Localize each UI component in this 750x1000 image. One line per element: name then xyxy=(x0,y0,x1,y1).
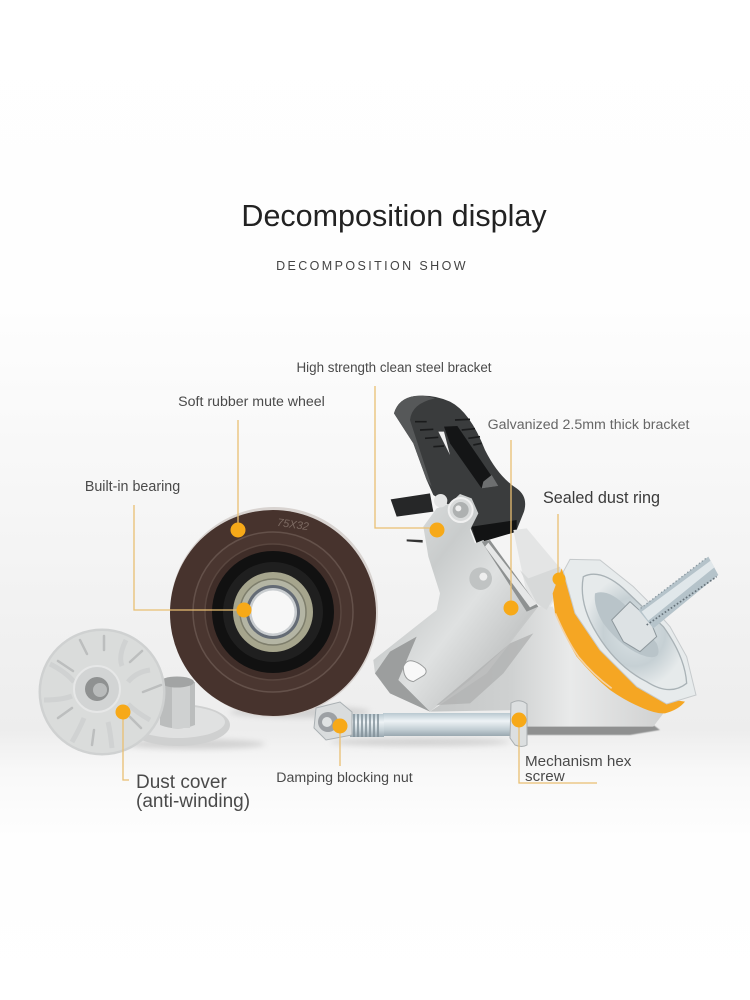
brake pedal xyxy=(391,396,525,543)
dust cover xyxy=(38,628,230,756)
sealed dust ring xyxy=(553,568,685,713)
label: galvanized bracket: Galvanized 2.5mm thick bracket xyxy=(488,417,689,433)
wheel xyxy=(170,507,378,717)
label: hex screw line one: Mechanism hex xyxy=(525,753,632,770)
label: soft rubber wheel: Soft rubber mute wheel xyxy=(178,394,325,410)
bracket side fold xyxy=(482,540,538,612)
subtitle: DECOMPOSITION SHOW xyxy=(276,259,468,273)
label: sealed dust ring: Sealed dust ring xyxy=(543,489,660,507)
labels xyxy=(85,360,689,812)
label: hex screw line two: screw xyxy=(525,768,565,785)
hex nut xyxy=(612,602,657,652)
label: dust cover: Dust cover xyxy=(136,772,227,793)
screw thread xyxy=(350,714,384,737)
leader lines xyxy=(123,386,597,783)
title: Decomposition display xyxy=(241,199,547,233)
dust cover face xyxy=(38,628,166,756)
pin xyxy=(407,539,423,543)
marker dots xyxy=(116,522,566,734)
label: damping nut: Damping blocking nut xyxy=(276,770,413,786)
screw shaft xyxy=(383,713,513,736)
ground shadows xyxy=(125,706,510,749)
wheel tyre xyxy=(170,507,378,717)
keyhole slot xyxy=(403,661,426,682)
label: high strength bracket: High strength clean steel bracket xyxy=(296,360,492,375)
wheel hub insert xyxy=(212,551,334,673)
bearing xyxy=(233,572,313,652)
bracket body shading xyxy=(430,607,663,727)
dust cover back piece xyxy=(126,676,230,746)
bracket plate xyxy=(373,494,538,712)
rivets xyxy=(434,494,492,590)
rear bracket plate xyxy=(513,528,563,613)
label: anti-winding: (anti-winding) xyxy=(136,791,250,812)
hex screw xyxy=(314,701,527,746)
threaded stud xyxy=(638,557,718,628)
screw head xyxy=(510,701,527,746)
body shadow xyxy=(527,725,660,735)
mounting plate xyxy=(563,559,696,704)
wheel moulding mark: 75X32 xyxy=(276,517,309,533)
lock nut xyxy=(314,702,352,740)
label: built-in bearing: Built-in bearing xyxy=(85,479,180,495)
swivel bracket assembly xyxy=(373,396,718,735)
